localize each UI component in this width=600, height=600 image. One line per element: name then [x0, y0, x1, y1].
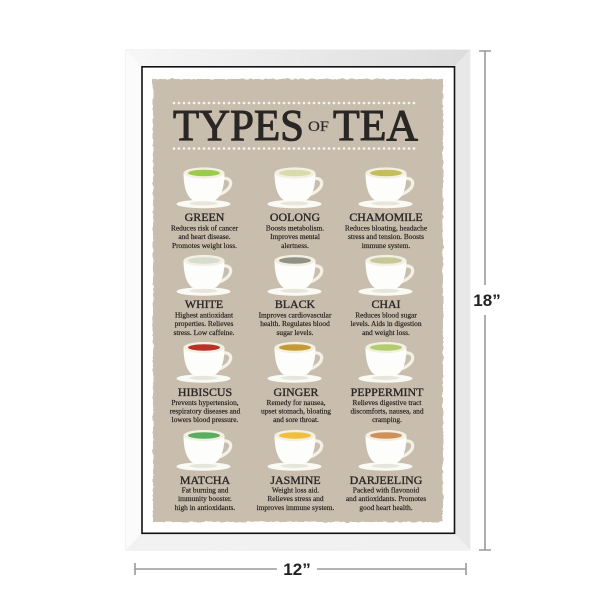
icon: peppermint tea cup [358, 342, 413, 383]
description: oolong: Improves mental [270, 232, 320, 241]
description: black: Improves cardiovascular [259, 310, 332, 320]
description: white: properties. Relieves [175, 319, 233, 328]
tea card: jasmine [257, 430, 335, 512]
icon: chamomile tea cup [358, 167, 413, 208]
tea card: chai [350, 255, 422, 337]
tea card: oolong [266, 167, 324, 250]
description: chamomile: stress and tension. Boosts [348, 232, 424, 241]
icon: ginger tea cup [268, 342, 322, 383]
description: chai: levels. Aids in digestion [350, 319, 422, 328]
description: darjeeling: Packed with flavonoid [353, 486, 420, 494]
icon: black tea cup [268, 255, 322, 296]
tea card: darjeeling [346, 430, 426, 512]
name: hibiscus: HIBISCUS [178, 385, 232, 399]
name: green: GREEN [185, 210, 225, 224]
description: matcha: high in antioxidants. [175, 503, 235, 512]
tea card: hibiscus [170, 342, 241, 424]
title: TYPES [173, 101, 304, 150]
description: ginger: and sore throat. [273, 415, 319, 424]
description: hibiscus: Prevents hypertension, [171, 398, 239, 407]
icon: oolong tea cup [268, 167, 322, 208]
name: ginger: GINGER [274, 385, 319, 399]
icon: chai tea cup [358, 255, 413, 296]
name: jasmine: JASMINE [270, 473, 321, 487]
tea card: white [173, 255, 235, 337]
description: peppermint: Relieves digestive tract [353, 398, 422, 407]
name: oolong: OOLONG [270, 210, 321, 224]
icon: darjeeling tea cup [358, 430, 413, 471]
name: matcha: MATCHA [180, 473, 231, 487]
width label: 12” [283, 560, 311, 579]
name: darjeeling: DARJEELING [350, 473, 423, 487]
tea card: green [171, 167, 239, 250]
description: black: sugar levels. [277, 328, 314, 337]
height dimension arrow [479, 51, 491, 550]
description: hibiscus: respiratory diseases and [170, 406, 241, 416]
icon: white tea cup [176, 255, 231, 296]
name: chamomile: CHAMOMILE [349, 210, 423, 224]
description: matcha: immunity booster. [178, 494, 232, 503]
width dimension arrow [135, 563, 466, 575]
icon: green tea cup [176, 167, 231, 208]
tea card: peppermint [350, 342, 424, 424]
description: green: Reduces risk of cancer [171, 224, 239, 232]
title [173, 101, 418, 150]
tea card: black [259, 255, 332, 337]
description: peppermint: discomforts, nausea, and [350, 406, 424, 416]
description: chai: Reduces blood sugar [355, 310, 417, 320]
tea card: chamomile [345, 167, 428, 250]
height label: 18” [473, 291, 501, 310]
torn paper poster background [153, 79, 443, 522]
description: green: Promotes weight loss. [172, 241, 237, 250]
name: white: WHITE [185, 297, 223, 311]
description: chamomile: immune system. [362, 241, 410, 250]
description: darjeeling: and antioxidants. Promotes [346, 494, 426, 503]
description: white: stress. Low caffeine. [173, 328, 235, 337]
icon: jasmine tea cup [268, 430, 322, 471]
description: green: and heart disease. [178, 232, 231, 241]
description: oolong: alertness. [281, 241, 309, 250]
tea card: ginger [261, 342, 331, 424]
bottom dotted divider [174, 147, 418, 150]
description: jasmine: Weight loss aid. [272, 486, 319, 494]
description: oolong: Boosts metabolism. [266, 224, 324, 232]
description: chamomile: Reduces bloating, headache [345, 224, 428, 232]
description: darjeeling: good heart health. [359, 503, 413, 512]
title: TEA [333, 101, 418, 150]
description: matcha: Fat burning and [182, 486, 229, 494]
icon: hibiscus tea cup [176, 342, 231, 383]
description: ginger: upset stomach, bloating [261, 406, 331, 416]
picture frame [126, 50, 470, 550]
name: black: BLACK [275, 297, 316, 311]
description: peppermint: cramping. [372, 415, 402, 424]
description: hibiscus: lowers blood pressure. [172, 415, 238, 424]
title: OF [308, 119, 329, 135]
icon: matcha tea cup [176, 430, 231, 471]
description: jasmine: improves immune system. [257, 503, 335, 512]
top dotted divider [174, 102, 418, 104]
tea card: matcha [175, 430, 235, 512]
name: peppermint: PEPPERMINT [351, 385, 424, 399]
name: chai: CHAI [371, 297, 401, 311]
description: ginger: Remedy for nausea, [267, 398, 326, 407]
description: black: health. Regulates blood [260, 319, 330, 328]
description: jasmine: Relieves stress and [267, 494, 324, 503]
description: white: Highest antioxidant [175, 310, 234, 320]
description: chai: and weight loss. [362, 328, 410, 337]
